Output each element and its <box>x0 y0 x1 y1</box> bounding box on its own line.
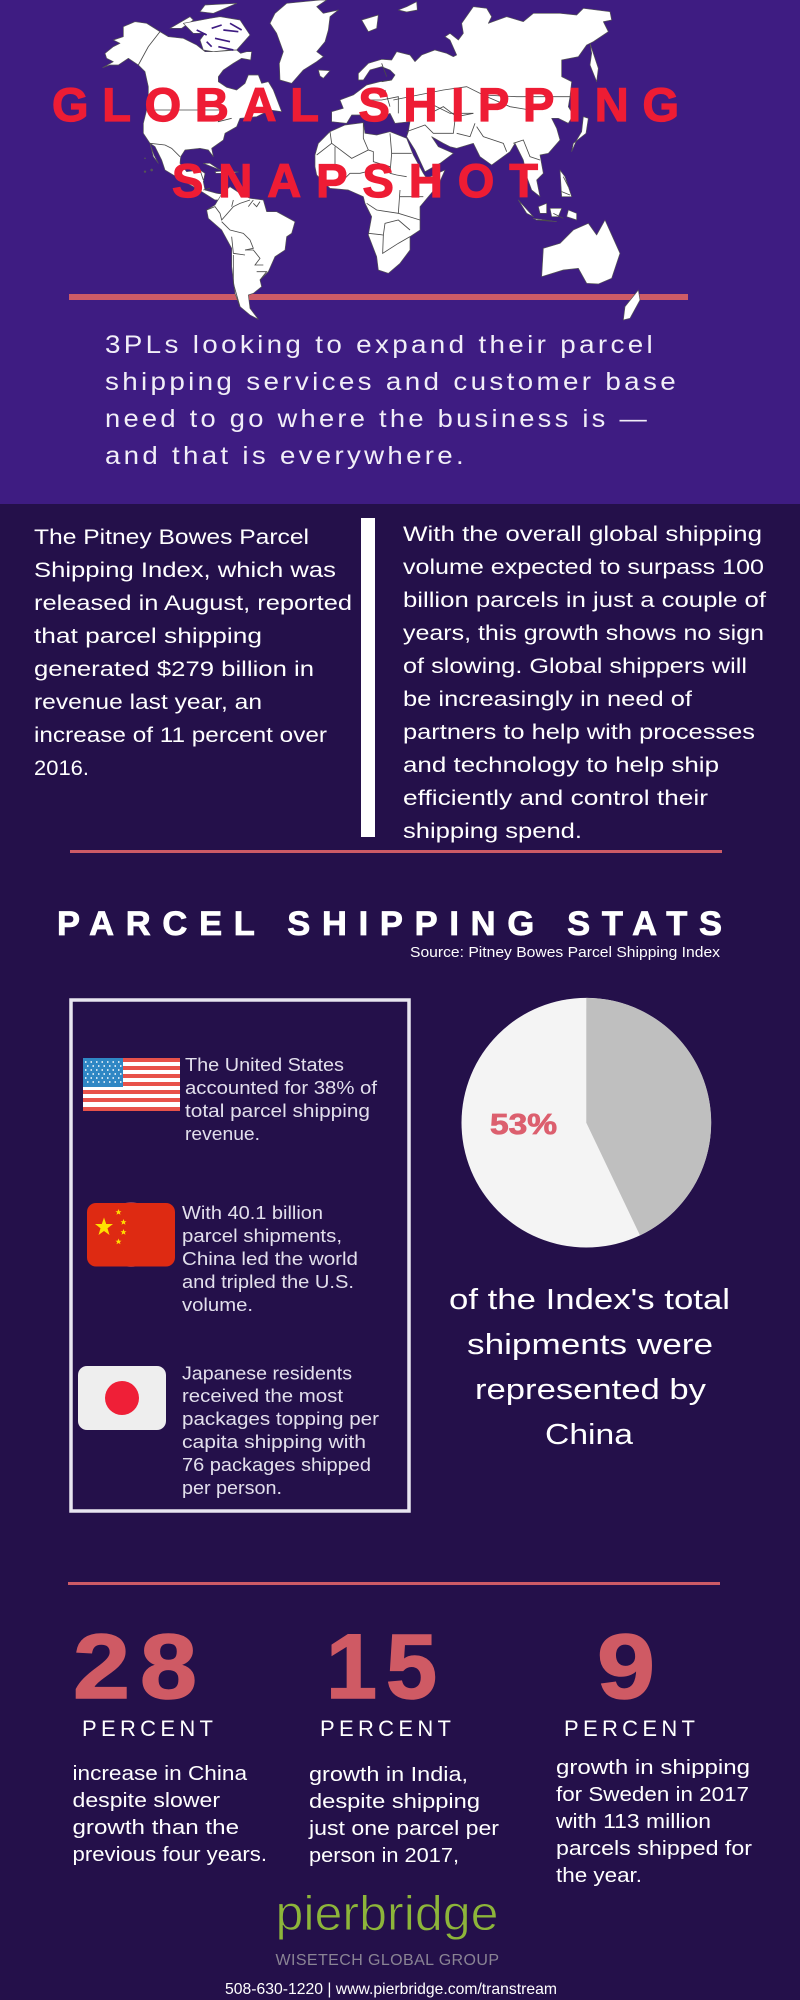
text: US fact <box>185 1055 378 1144</box>
icon: China flag <box>87 1202 175 1267</box>
stat: 15 percent: despite shipping <box>309 1791 480 1813</box>
panel: left paragraph: released in August, reported <box>34 591 352 615</box>
panel: right paragraph: of slowing. Global shippers will <box>403 654 747 678</box>
panel: right paragraph: be increasingly in need of <box>403 687 692 711</box>
section rule <box>68 1582 720 1585</box>
source note: Source: Pitney Bowes Parcel Shipping Index <box>410 944 721 961</box>
pie caption: represented by <box>475 1374 707 1406</box>
contact line: 508-630-1220 | www.pierbridge.com/transtream <box>225 1981 557 1998</box>
stat: 28 percent: growth than the <box>72 1817 239 1839</box>
stat: 15 percent <box>308 1616 499 1867</box>
stat: 9 percent: the year. <box>556 1865 642 1887</box>
text: Japan fact <box>182 1364 379 1498</box>
panel: header <box>0 0 800 504</box>
panel: left paragraph: The Pitney Bowes Parcel <box>34 525 309 549</box>
panel: left paragraph <box>34 525 352 780</box>
pie chart <box>462 998 711 1248</box>
stat: 15 percent: 15 <box>326 1616 446 1718</box>
panel: right paragraph: With the overall global shipping <box>403 522 762 546</box>
intro text: need to go where the business is — <box>105 405 650 433</box>
panel: left paragraph: Shipping Index, which was <box>34 558 336 582</box>
stat: 9 percent: for Sweden in 2017 <box>556 1784 749 1806</box>
panel: right paragraph: billion parcels in just a couple of <box>403 588 766 612</box>
intro text: and that is everywhere. <box>105 442 467 470</box>
logo: pierbridge: WISETECH GLOBAL GROUP <box>276 1952 499 1969</box>
text: China fact: China led the world <box>182 1249 358 1269</box>
text: China fact <box>182 1203 358 1315</box>
pie value: 53% <box>490 1109 557 1141</box>
stat: 15 percent: PERCENT <box>320 1716 451 1741</box>
stat: 9 percent: PERCENT <box>564 1716 695 1741</box>
stat: 9 percent: 9 <box>597 1616 655 1718</box>
pie caption: shipments were <box>467 1329 713 1361</box>
stat: 15 percent: growth in India, <box>309 1764 468 1786</box>
icon: US flag <box>83 1058 180 1111</box>
text: China fact: parcel shipments, <box>182 1226 342 1246</box>
logo: pierbridge <box>276 1887 499 1969</box>
text: Japan fact: Japanese residents <box>182 1364 352 1384</box>
section heading: PARCEL SHIPPING STATS <box>57 905 722 943</box>
world map <box>103 0 640 320</box>
intro text <box>105 331 679 470</box>
title <box>52 78 679 207</box>
stat: 28 percent: PERCENT <box>82 1716 213 1741</box>
stat: 28 percent: previous four years. <box>72 1844 267 1866</box>
panel: right paragraph: partners to help with processes <box>403 720 755 744</box>
logo: pierbridge: pierbridge <box>276 1887 498 1941</box>
panel: right paragraph: volume expected to surpass 100 <box>403 555 764 579</box>
panel: left paragraph: increase of 11 percent over <box>34 723 327 747</box>
stat: 28 percent: increase in China <box>72 1763 248 1785</box>
text: US fact: total parcel shipping <box>185 1101 370 1121</box>
text: US fact: The United States <box>185 1055 344 1075</box>
panel: country facts <box>71 1000 409 1511</box>
stat: 15 percent: just one parcel per <box>308 1818 499 1840</box>
text: Japan fact: 76 packages shipped <box>182 1455 371 1475</box>
icon: Japan flag <box>78 1366 166 1430</box>
text: China fact: volume. <box>182 1295 253 1315</box>
panel: left paragraph: that parcel shipping <box>34 624 262 648</box>
panel: right paragraph: and technology to help ship <box>403 753 719 777</box>
panel: right paragraph: years, this growth shows no sign <box>403 621 764 645</box>
stat: 15 percent: person in 2017, <box>309 1845 459 1867</box>
intro text: 3PLs looking to expand their parcel <box>105 331 656 359</box>
stat: 9 percent: parcels shipped for <box>556 1838 752 1860</box>
text: Japan fact: per person. <box>182 1478 282 1498</box>
panel: left paragraph: revenue last year, an <box>34 690 262 714</box>
text: US fact: revenue. <box>185 1124 260 1144</box>
stat: 9 percent <box>555 1616 752 1887</box>
intro text: shipping services and customer base <box>105 368 679 396</box>
text: US fact: accounted for 38% of <box>185 1078 378 1098</box>
panel: left paragraph: 2016. <box>34 756 89 780</box>
section rule <box>70 850 722 853</box>
pie caption: of the Index's total <box>449 1284 730 1316</box>
panel: right paragraph <box>403 522 766 843</box>
title: SNAPSHOT <box>172 154 538 207</box>
stat: 28 percent: despite slower <box>72 1790 220 1812</box>
stat: 28 percent: 28 <box>73 1616 207 1718</box>
stat: 28 percent <box>72 1616 267 1866</box>
panel: right paragraph: shipping spend. <box>403 819 582 843</box>
column divider <box>361 518 375 837</box>
panel: right paragraph: efficiently and control their <box>403 786 708 810</box>
title: GLOBAL SHIPPING <box>52 78 679 131</box>
panel: left paragraph: generated $279 billion in <box>34 657 314 681</box>
text: China fact: and tripled the U.S. <box>182 1272 354 1292</box>
text: China fact: With 40.1 billion <box>182 1203 323 1223</box>
stat: 9 percent: with 113 million <box>555 1811 711 1833</box>
title rule <box>69 294 688 300</box>
text: Japan fact: capita shipping with <box>182 1432 366 1452</box>
text: Japan fact: packages topping per <box>182 1409 379 1429</box>
stat: 9 percent: growth in shipping <box>556 1757 750 1779</box>
text: Japan fact: received the most <box>182 1386 343 1406</box>
pie caption <box>449 1284 730 1451</box>
pie caption: China <box>545 1419 634 1451</box>
